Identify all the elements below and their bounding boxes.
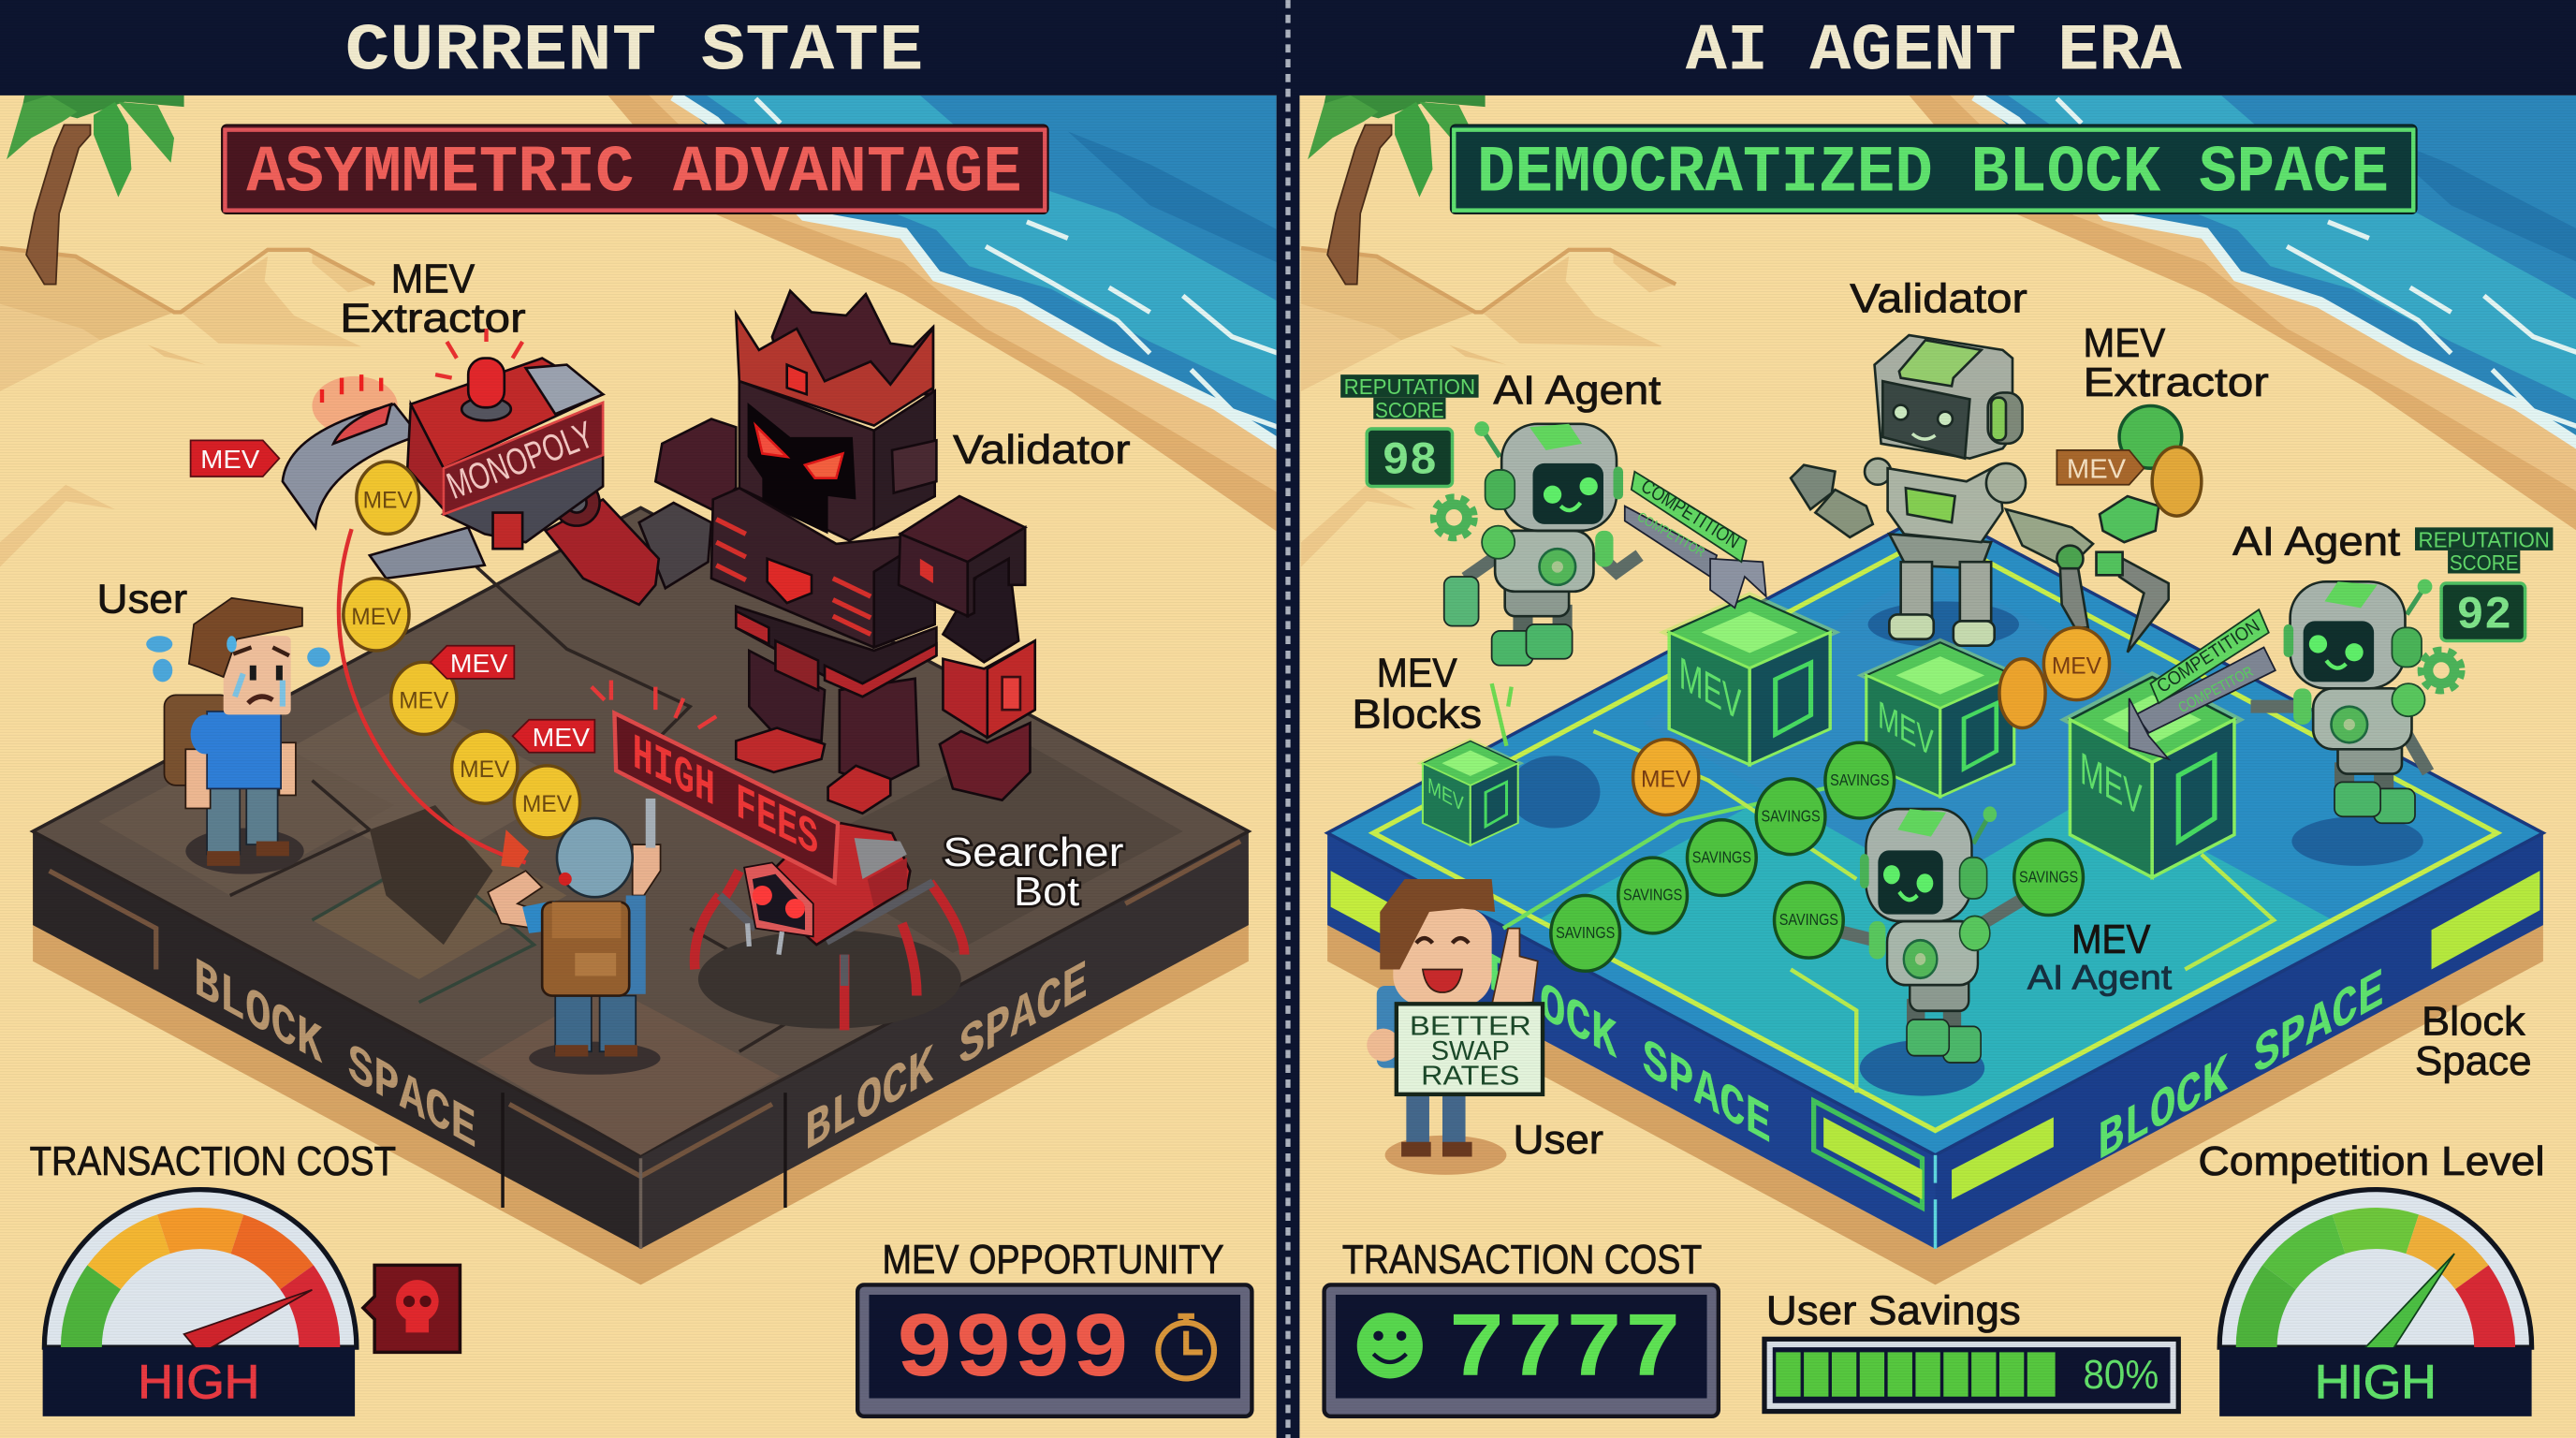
labels: AI agent era: Blocks: [1352, 691, 1482, 737]
platform label: block space right: BLOCK SPACE: [2098, 958, 2384, 1177]
coin trail: stolen MEV: MEV: [351, 605, 402, 630]
title: current state: CURRENT STATE: [345, 16, 923, 90]
banner: asymmetric advantage: ASYMMETRIC ADVANTAGE: [246, 138, 1022, 212]
labels: current state: Searcher: [943, 829, 1123, 875]
labels: current state: Validator: [953, 427, 1131, 473]
reputation badge: 92: 92: [2456, 589, 2511, 641]
panel: current state platform: [33, 507, 1249, 1284]
character: searcher bot spider: [695, 823, 964, 1030]
reputation badge: 98: [1340, 374, 1479, 487]
label: transaction cost right: TRANSACTION COST: [1342, 1237, 1702, 1283]
coins: savings: SAVINGS: [1692, 847, 1751, 866]
coin trail: stolen MEV: MEV: [522, 792, 573, 817]
tool: competition wrench: COMPETITOR: [2176, 664, 2256, 716]
tool: competition wrench: COMPETITION: [2153, 616, 2263, 697]
cube: MEV block 3: MEV: [2080, 742, 2143, 826]
tag: MEV 3: [513, 720, 594, 753]
coin trail: stolen MEV: [339, 462, 580, 862]
labels: AI agent era: MEV: [2071, 917, 2151, 962]
coins: MEV: [1633, 627, 2110, 814]
labels: current state: [97, 256, 1131, 915]
background: beach, right panel: [1284, 82, 2576, 1438]
icon: stopwatch: [1158, 1316, 1214, 1378]
icon: skull warning: [363, 1265, 460, 1352]
cube: MEV block 3: [2070, 677, 2234, 877]
labels: AI agent era: MEV: [1377, 651, 1457, 697]
labels: AI agent era: Space: [2415, 1038, 2532, 1084]
labels: AI agent era: Validator: [1850, 275, 2027, 321]
tag: MEV 1: MEV: [200, 445, 260, 474]
labels: AI agent era: Extractor: [2083, 360, 2269, 405]
counter: MEV opportunity 9999: 9999: [896, 1299, 1131, 1403]
robot: validator: [1791, 335, 2169, 653]
coin trail: stolen MEV: MEV: [363, 488, 413, 513]
counter: transaction cost 7777: 7777: [1447, 1299, 1682, 1403]
coins: savings: SAVINGS: [1830, 770, 1889, 789]
coins: savings: SAVINGS: [1623, 886, 1682, 904]
cube: small MEV block: MEV: [1427, 773, 1464, 817]
icon: smiley: [1357, 1313, 1423, 1378]
tag: MEV 1: [191, 440, 279, 477]
tag: MEV 2: MEV: [450, 649, 508, 678]
label: competition level: Competition Level: [2198, 1138, 2545, 1184]
header: AI agent era: [1299, 0, 2576, 95]
coins: savings: SAVINGS: [1779, 910, 1838, 929]
tag: MEV extractor coins: [2056, 405, 2202, 516]
labels: current state: User: [97, 577, 187, 623]
reputation badge: 92: [2415, 527, 2553, 641]
sign: high fees: [614, 713, 838, 882]
panel: AI agent era platform: [1327, 509, 2543, 1284]
coins: MEV: MEV: [2052, 654, 2102, 680]
robot: bottom AI agent: [1827, 806, 2029, 1063]
labels: AI agent era: Block: [2422, 999, 2525, 1045]
counter: transaction cost 7777: [1325, 1284, 1719, 1416]
sign: better swap rates: BETTER: [1410, 1012, 1531, 1042]
sign: better swap rates: [1397, 1004, 1543, 1094]
cube: MEV block 2: [1866, 642, 2014, 797]
labels: AI agent era: AI Agent: [2232, 519, 2400, 565]
title: AI agent era: AI AGENT ERA: [1686, 16, 2183, 90]
validator: giant red robot: [546, 291, 1035, 814]
platform label: block space left: BLOCK SPACE: [1488, 942, 1771, 1160]
background: beach, left panel: [0, 82, 1298, 1438]
coin trail: stolen MEV: MEV: [460, 757, 510, 783]
labels: current state: MEV: [391, 256, 476, 301]
coins: savings: SAVINGS: [1761, 807, 1821, 826]
robot: AI agent right: [2130, 580, 2462, 823]
label: user savings: User Savings: [1766, 1288, 2021, 1334]
tool: competition wrench: [2130, 609, 2276, 759]
reputation badge: 98: SCORE: [1375, 398, 1444, 422]
coins: savings: [1551, 742, 2083, 971]
platform label: block space right: BLOCK SPACE: [805, 949, 1088, 1167]
label: transaction cost: TRANSACTION COST: [30, 1138, 396, 1184]
cube: MEV block 2: MEV: [1878, 693, 1934, 766]
coins: MEV: MEV: [1641, 768, 1691, 793]
labels: AI agent era: User: [1513, 1117, 1603, 1163]
tag: MEV 3: MEV: [533, 723, 590, 752]
claw label: monopoly: MONOPOLY: [441, 412, 599, 507]
coins: savings: SAVINGS: [1556, 923, 1615, 942]
progress bar: user savings 80%: 80%: [2083, 1352, 2159, 1398]
tag: MEV extractor coins: MEV: [2067, 455, 2127, 485]
character: sad user: [146, 598, 330, 874]
reputation badge: 98: 98: [1382, 434, 1437, 487]
gauge: transaction cost high: [43, 1190, 357, 1416]
sign: better swap rates: RATES: [1421, 1061, 1519, 1091]
gauge value: HIGH: [2315, 1356, 2437, 1409]
center divider: [1277, 0, 1299, 1438]
labels: current state: Bot: [1014, 869, 1079, 915]
sign: high fees: HIGH FEES: [633, 725, 818, 870]
label: MEV opportunity: MEV OPPORTUNITY: [882, 1237, 1224, 1283]
labels: AI agent era: [1352, 275, 2532, 1163]
reputation badge: 98: REPUTATION: [1344, 374, 1475, 399]
labels: AI agent era: AI Agent: [2027, 959, 2172, 997]
header: current state: [0, 0, 1277, 95]
character: hiker: [488, 799, 661, 1075]
icon: gear: [2421, 650, 2462, 691]
labels: AI agent era: AI Agent: [1493, 368, 1661, 414]
reputation badge: 92: REPUTATION: [2419, 527, 2550, 551]
progress bar: user savings 80%: [1764, 1339, 2178, 1412]
character: happy user with sign: [1367, 879, 1543, 1175]
labels: AI agent era: MEV: [2083, 320, 2166, 366]
banner: democratized block space: DEMOCRATIZED BLOCK SPACE: [1477, 138, 2389, 212]
coin trail: stolen MEV: MEV: [399, 688, 449, 713]
tool: competition wrench: COMPETITION: [1637, 476, 1743, 552]
labels: current state: Extractor: [340, 296, 526, 342]
icon: MEV extractor monopoly claw: [283, 329, 603, 579]
gauge: competition level high: [2219, 1190, 2532, 1416]
tool: competition wrench: [1625, 472, 1766, 608]
cube: small MEV block: [1423, 683, 1518, 845]
cube: MEV block 1: MEV: [1679, 647, 1741, 731]
robot: AI agent left: [1433, 421, 1766, 666]
gauge value: HIGH: [138, 1356, 259, 1409]
tag: MEV 2: [431, 646, 514, 679]
tool: competition wrench: COMPETITOR: [1635, 508, 1708, 560]
sign: better swap rates: SWAP: [1431, 1036, 1510, 1066]
counter: MEV opportunity 9999: [857, 1284, 1251, 1416]
icon: gear: [1433, 497, 1474, 538]
platform label: block space left: BLOCK SPACE: [194, 947, 476, 1165]
coins: savings: SAVINGS: [2019, 867, 2078, 886]
sparks: fee alert: [592, 681, 716, 727]
reputation badge: 92: SCORE: [2450, 550, 2519, 575]
cube: MEV block 1: [1669, 596, 1830, 765]
